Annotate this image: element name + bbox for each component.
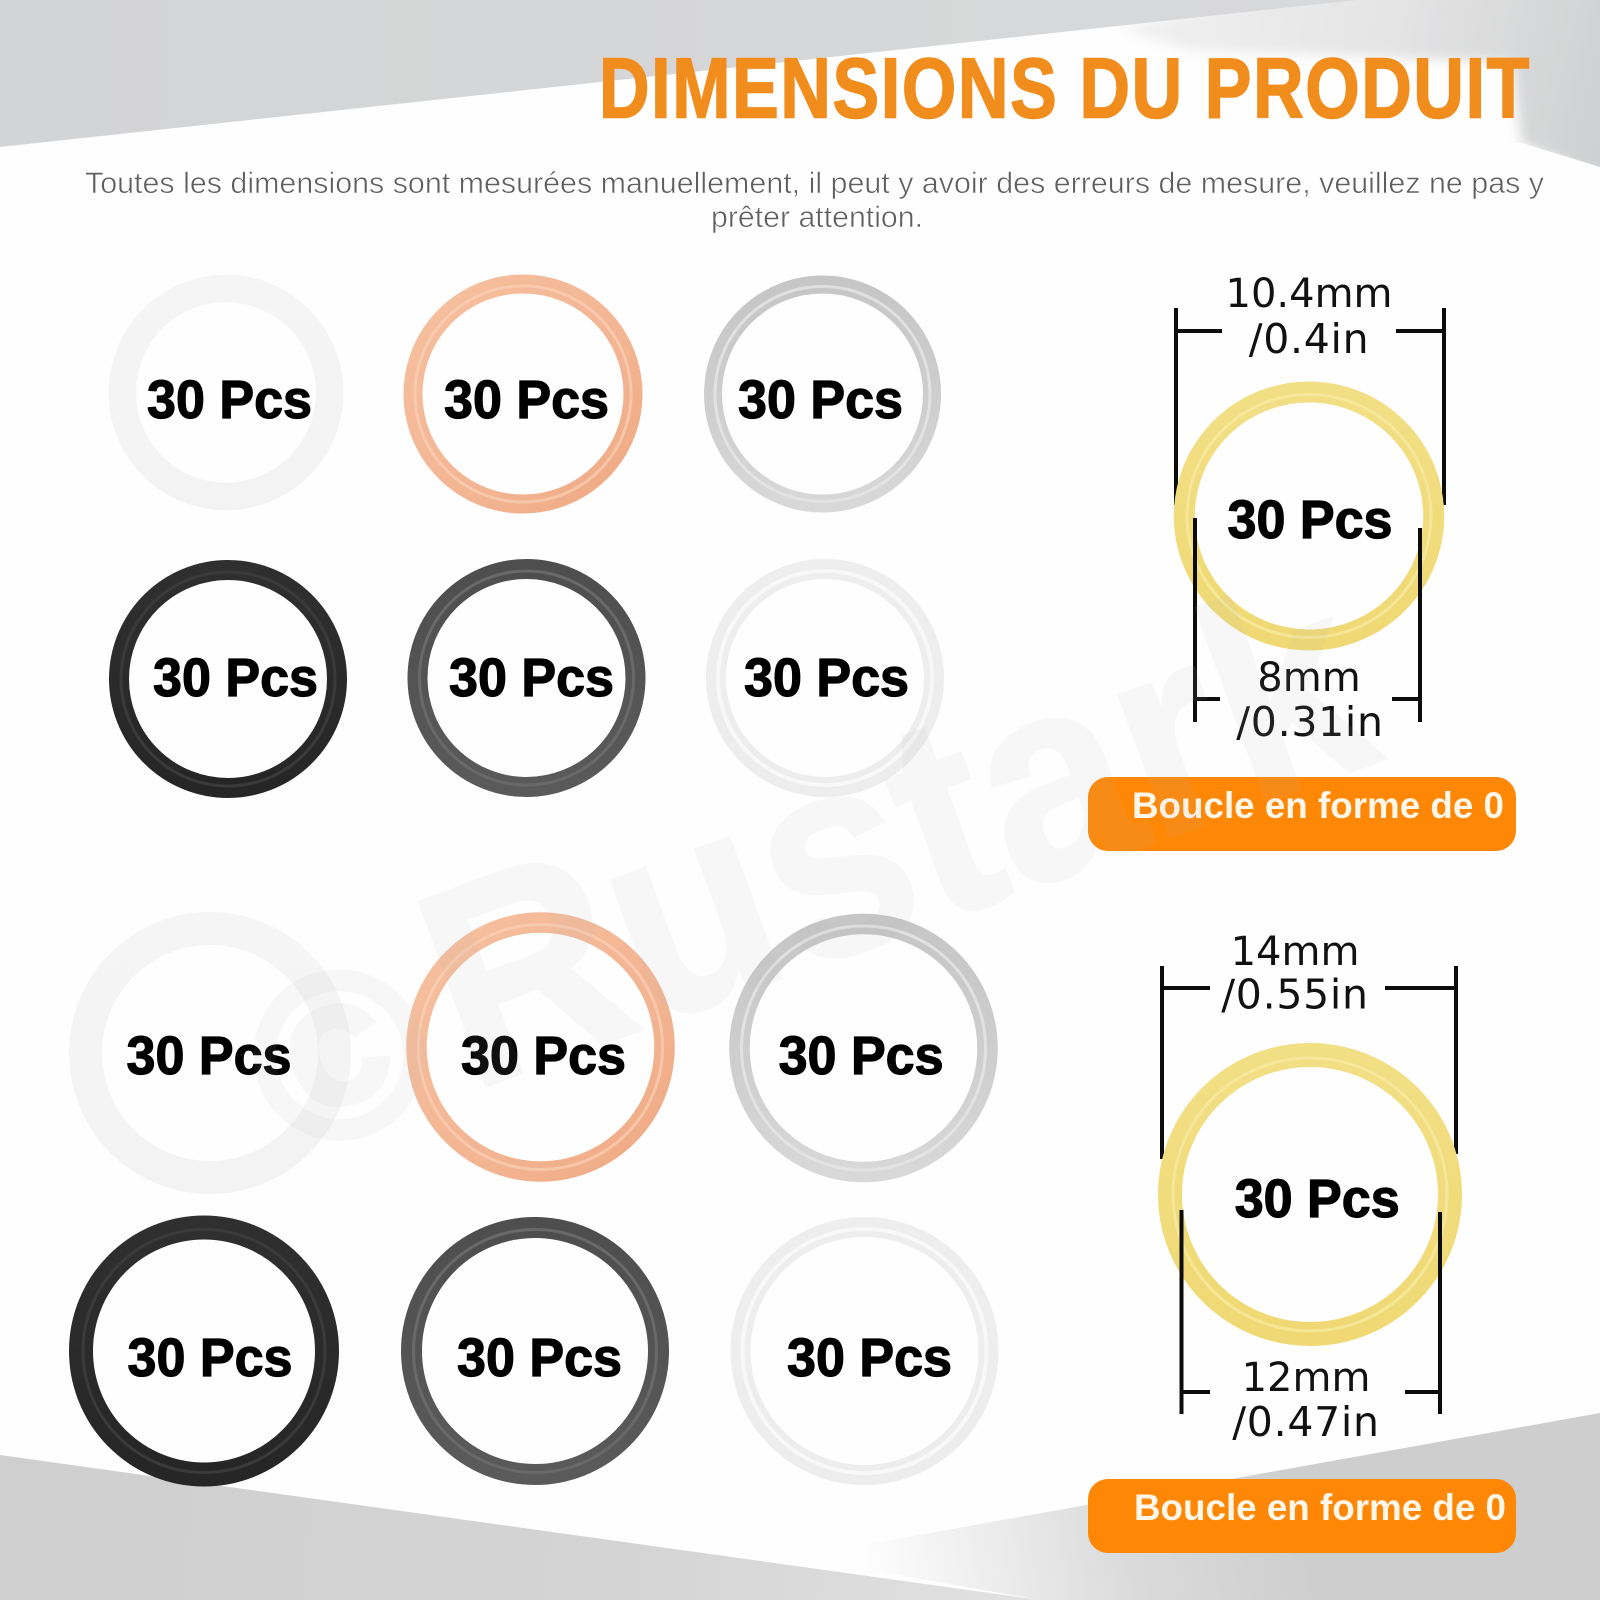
inner width dimension: /0.47in — [1232, 1398, 1380, 1446]
inner width dimension — [1195, 518, 1420, 746]
ring: clear large — [740, 1227, 988, 1475]
ring: clear small: 30 Pcs — [744, 648, 909, 708]
ring: black large — [81, 1228, 327, 1474]
ring: dark grey small — [418, 569, 636, 787]
ring: silver small — [713, 284, 932, 504]
panel: dimension diagram small ring — [1088, 271, 1516, 851]
ring: white large — [86, 928, 334, 1178]
watermark: © — [216, 905, 463, 1205]
ring: clear small — [716, 569, 934, 787]
watermark — [199, 516, 1409, 1216]
ring: dark grey small: 30 Pcs — [449, 648, 614, 708]
outer width dimension — [1176, 271, 1444, 505]
ring: white large: 30 Pcs — [126, 1026, 292, 1086]
outer width dimension: /0.55in — [1221, 970, 1369, 1018]
ring: white small — [122, 288, 330, 496]
subtitle note: Toutes les dimensions sont mesurées manuellement, il peut y avoir des erreurs de mesure, veuillez ne pas y — [85, 167, 1544, 200]
label button small ring: Boucle en forme de 0 — [1132, 785, 1504, 826]
panel: large rings 14mm — [81, 922, 988, 1475]
ring: yellow large — [1170, 1055, 1450, 1334]
ring: yellow small: 30 Pcs — [1228, 490, 1392, 550]
outer width dimension: 10.4mm — [1226, 271, 1392, 317]
ring: copper small — [413, 284, 633, 504]
label button large ring: Boucle en forme de 0 — [1134, 1487, 1506, 1528]
ring: dark grey large — [412, 1228, 658, 1474]
inner width dimension: /0.31in — [1236, 698, 1384, 746]
ring: clear large: 30 Pcs — [787, 1328, 952, 1388]
outer width dimension — [1162, 929, 1456, 1159]
ring: copper large: 30 Pcs — [461, 1026, 626, 1086]
inner width dimension: 8mm — [1257, 655, 1361, 701]
outer width dimension: /0.4in — [1249, 315, 1369, 363]
subtitle note: prêter attention. — [711, 201, 923, 234]
ring: copper large — [416, 922, 664, 1172]
ring: yellow small — [1184, 392, 1434, 640]
ring: white small: 30 Pcs — [147, 370, 312, 430]
ring: copper small: 30 Pcs — [444, 370, 609, 430]
ring: silver large: 30 Pcs — [779, 1026, 944, 1086]
subtitle note — [85, 167, 1544, 234]
ring: black small: 30 Pcs — [153, 648, 318, 708]
outer width dimension: 14mm — [1231, 929, 1359, 975]
watermark: Rustark — [382, 516, 1409, 1149]
panel: dimension diagram large ring — [1088, 929, 1516, 1553]
ring: yellow large: 30 Pcs — [1235, 1169, 1400, 1229]
ring: black large: 30 Pcs — [128, 1328, 292, 1388]
inner width dimension — [1182, 1210, 1440, 1446]
ring: dark grey large: 30 Pcs — [457, 1328, 622, 1388]
ring: silver small: 30 Pcs — [738, 370, 903, 430]
label button large ring — [1088, 1479, 1516, 1553]
panel: small rings 10.4mm — [119, 284, 934, 788]
ring: silver large — [740, 924, 988, 1172]
label button small ring — [1088, 777, 1516, 851]
ring: black small — [119, 570, 337, 788]
inner width dimension: 12mm — [1242, 1355, 1370, 1401]
